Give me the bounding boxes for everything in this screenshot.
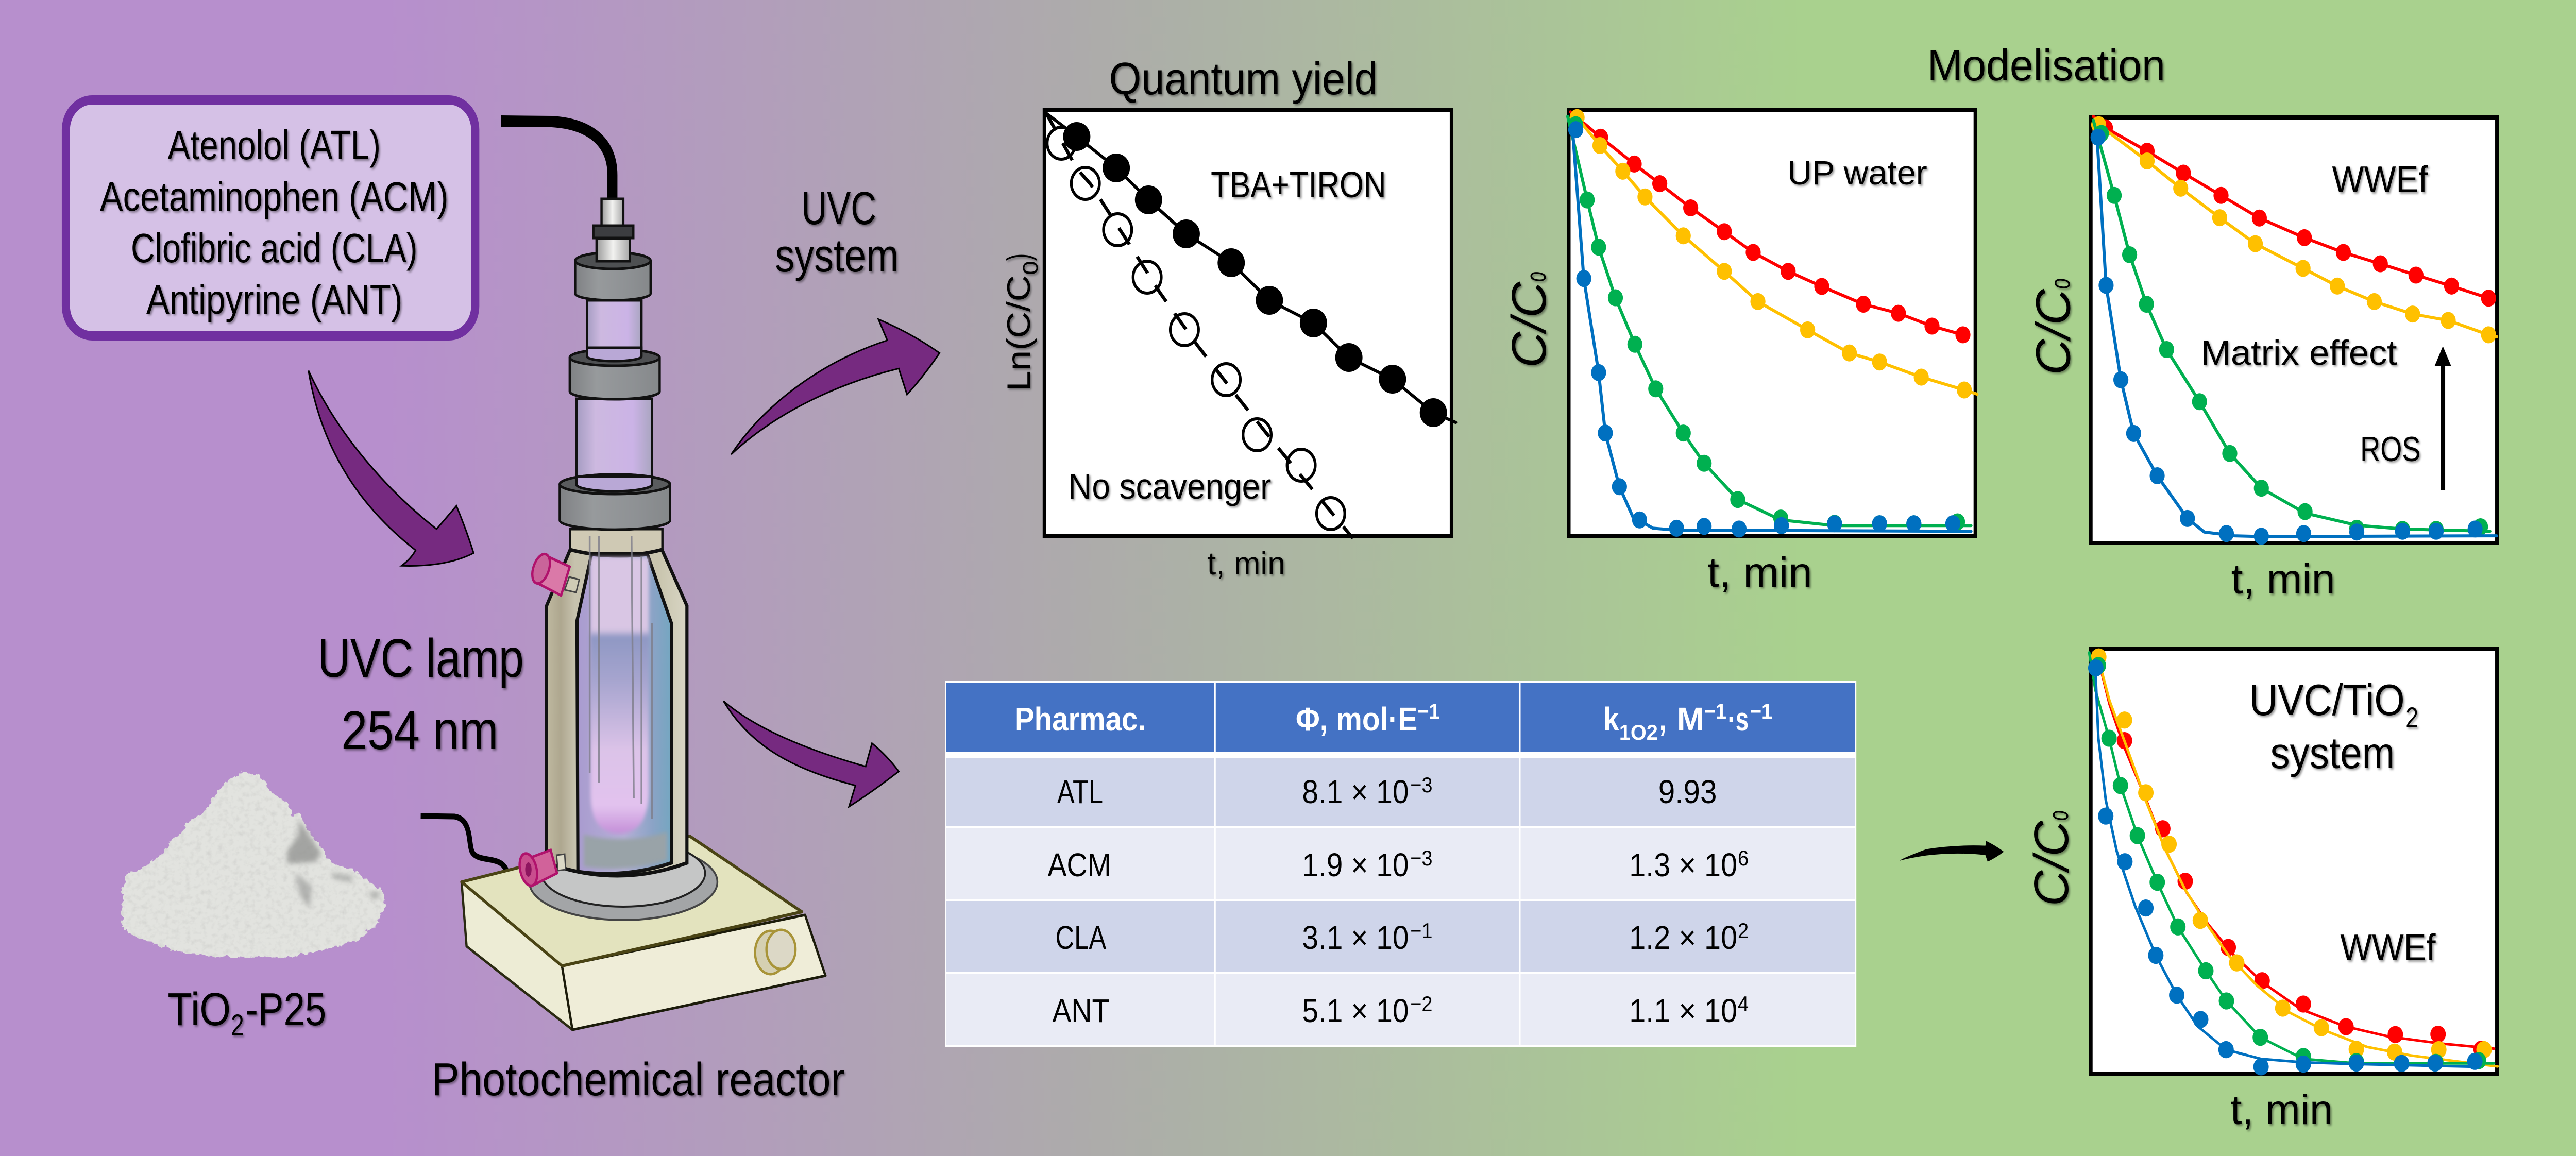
label: TiO2-P25: -P25 [245, 983, 326, 1035]
icon: photochemical reactor [421, 121, 825, 1030]
heading: Quantum yield: Quantum yield [1109, 53, 1378, 104]
axis label: C/C0 UVC/TiO2: C/C [2025, 820, 2079, 906]
no scavenger series [1046, 113, 1353, 538]
row: ANT: 5.1 × 10 [1302, 992, 1409, 1029]
label: UVC system [775, 182, 899, 281]
label: Photochemical reactor: Photochemical reactor [432, 1053, 844, 1105]
row: ANT: −2 [1410, 992, 1432, 1016]
green series [2089, 653, 2494, 1071]
reactor window [577, 554, 671, 874]
row: CLA: 2 [1738, 919, 1749, 943]
hotplate base [462, 836, 825, 1030]
icon: TiO2 powder pile [123, 771, 385, 957]
row: ANT: 4 [1738, 992, 1749, 1016]
panel: pharmaceuticals list [66, 100, 475, 336]
window bottom liquid [584, 832, 667, 869]
labels: UVC/TiO2 system, WWEf: system [2270, 728, 2395, 777]
yellow series [1570, 109, 1977, 398]
header row [946, 683, 1855, 752]
row: CLA: 1.2 × 10 [1629, 919, 1737, 956]
row: ACM: 1.9 × 10 [1302, 846, 1409, 883]
labels: UVC/TiO2 system, WWEf: UVC/TiO [2249, 675, 2405, 724]
label: UVC system: system [775, 229, 899, 281]
labels: WWEf, Matrix effect, ROS: ROS [2360, 429, 2420, 469]
header row: Φ, mol·E [1296, 701, 1417, 738]
label: TiO2-P25 [167, 983, 326, 1042]
table: quantum yield and rate constants [945, 681, 1856, 1047]
axis label: C/C0 UP water: C/C [1502, 281, 1556, 368]
tube caps and glass sections [560, 199, 670, 553]
base plate disc [529, 840, 717, 920]
green series [1568, 116, 1971, 532]
labels: WWEf, Matrix effect, ROS: Matrix effect [2201, 333, 2397, 372]
row: ACM: 6 [1738, 846, 1749, 871]
blue series [2091, 129, 2497, 545]
axis label: C/C0 UP water: o [1520, 271, 1552, 282]
row: CLA: CLA [1056, 919, 1107, 956]
hotplate power cable [421, 816, 506, 870]
row: ANT [946, 974, 1855, 1045]
axis label: t, min WWEf: t, min [2231, 556, 2335, 603]
yellow series [2091, 116, 2497, 343]
panel: pharmaceuticals list: Atenolol (ATL) [167, 122, 381, 168]
row: ATL: 9.93 [1658, 773, 1717, 810]
labels: UVC/TiO2 system, WWEf: 2 [2405, 702, 2418, 734]
arrow: ROS increase [2435, 346, 2451, 490]
label: TiO2-P25: 2 [231, 1008, 244, 1042]
upper pink knob [529, 551, 579, 596]
red series [2098, 659, 2494, 1058]
labels: UVC/TiO2 system, WWEf [2249, 675, 2436, 968]
glass reflection lines [590, 536, 652, 819]
axis label: t, min: t, min [1207, 546, 1285, 582]
label: UVC system: UVC [802, 182, 876, 234]
header row: −1 [1750, 700, 1772, 724]
axis label: C/C0 WWEf: C/C [2026, 288, 2080, 375]
chart labels: TBA+TIRON [1211, 164, 1386, 206]
row: ATL: −3 [1410, 773, 1432, 797]
lamp power cable [501, 121, 613, 201]
arrow: reactor to table [723, 701, 899, 807]
label: UVC lamp wavelength: UVC lamp [317, 628, 524, 689]
row: ATL [946, 758, 1855, 826]
labels: WWEf, Matrix effect, ROS [2201, 159, 2428, 469]
axis label: Ln(C/C0): 0 [1020, 261, 1042, 275]
chart: quantum yield [1044, 110, 1455, 538]
row: ATL: 8.1 × 10 [1302, 773, 1409, 810]
header row: 1O2 [1619, 721, 1658, 745]
panel: pharmaceuticals list: Clofibric acid (CLA) [131, 225, 417, 271]
row: ANT: 1.1 × 10 [1629, 992, 1737, 1029]
header row: k [1603, 701, 1619, 738]
arrow: reactor to UVC system [731, 319, 940, 454]
red series [2093, 116, 2496, 307]
axis label: t, min UP water: t, min [1707, 549, 1812, 596]
chart labels [1068, 164, 1386, 506]
header row: ·s [1728, 701, 1749, 738]
axis label: Ln(C/C0): ) [1001, 253, 1037, 261]
row: CLA: 3.1 × 10 [1302, 919, 1409, 956]
chart labels: No scavenger [1068, 466, 1271, 506]
label: UVC lamp wavelength [317, 628, 524, 761]
row: ACM: ACM [1048, 846, 1111, 883]
panel: pharmaceuticals list: Acetaminophen (ACM) [100, 174, 448, 219]
label: UVC lamp wavelength: 254 nm [341, 701, 498, 761]
label: TiO2-P25: TiO [167, 983, 231, 1035]
panel: pharmaceuticals list: Antipyrine (ANT) [146, 277, 402, 322]
axis label: C/C0 WWEf: o [2045, 278, 2076, 289]
row: CLA [946, 901, 1855, 972]
green series [2093, 120, 2490, 538]
labels: UVC/TiO2 system, WWEf: WWEf [2340, 927, 2436, 968]
yellow series [2091, 649, 2498, 1066]
row: ACM: −3 [1410, 846, 1432, 871]
TBA+TIRON series [1046, 113, 1455, 427]
chart: UP water [1568, 109, 1977, 537]
arrow: pharmaceuticals to reactor [309, 370, 473, 566]
row: ANT: ANT [1052, 992, 1109, 1029]
header row: −1 [1704, 700, 1726, 724]
axis label: Ln(C/C0): Ln(C/C [1001, 275, 1037, 391]
labels: WWEf, Matrix effect, ROS: WWEf [2332, 159, 2428, 200]
row: CLA: −1 [1410, 919, 1432, 943]
chart: WWEf matrix effect [2091, 116, 2497, 545]
axis label: t, min UVC/TiO2: t, min [2230, 1086, 2333, 1133]
reactor vessel body [547, 550, 687, 876]
chart: UVC/TiO2 system [2088, 649, 2498, 1076]
header row: M [1677, 701, 1704, 738]
header row: −1 [1417, 700, 1440, 724]
heading: Modelisation: Modelisation [1927, 41, 2165, 90]
header row: Pharmac. [1015, 701, 1146, 738]
lower pink knob [517, 850, 566, 888]
row: ACM [946, 828, 1855, 899]
header row: , [1659, 701, 1667, 738]
UV lamp tube [590, 557, 649, 834]
row: ATL: ATL [1057, 773, 1103, 810]
red series [1570, 112, 1971, 343]
row: ACM: 1.3 × 10 [1629, 846, 1737, 883]
label: UP water: UP water [1787, 155, 1927, 192]
blue series [2088, 659, 2483, 1076]
arrow: table to UVC/TiO2 chart [1900, 841, 2004, 862]
axis label: C/C0 UVC/TiO2: o [2043, 810, 2074, 821]
blue series [1568, 121, 1971, 537]
